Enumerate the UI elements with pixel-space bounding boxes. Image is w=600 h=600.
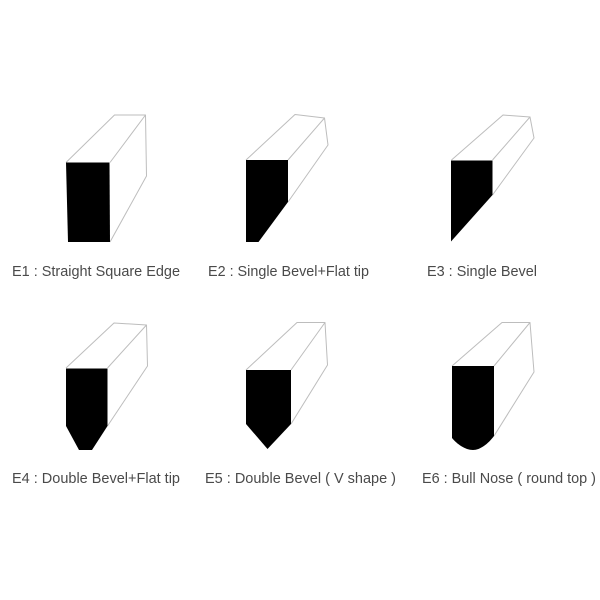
icon: E4 profile bbox=[66, 323, 148, 450]
icon: E3 profile bbox=[451, 115, 534, 242]
icon: E1 profile bbox=[66, 115, 146, 242]
label: E1: E1 : Straight Square Edge bbox=[12, 263, 180, 280]
panel: E5 double bevel V shape bbox=[205, 322, 396, 487]
label: E4: E4 : Double Bevel+Flat tip bbox=[12, 470, 180, 487]
label: E2: E2 : Single Bevel+Flat tip bbox=[208, 263, 369, 280]
label: E3: E3 : Single Bevel bbox=[427, 263, 537, 280]
panel: E4 double bevel and flat tip bbox=[12, 323, 180, 487]
icon: E2 profile bbox=[246, 114, 328, 242]
label: E5: E5 : Double Bevel ( V shape ) bbox=[205, 470, 396, 487]
icon: E6 profile bbox=[452, 322, 534, 450]
panel: E2 single bevel and flat tip bbox=[208, 114, 369, 280]
panel: E6 bull nose round top bbox=[422, 322, 596, 487]
icon: E5 profile bbox=[246, 322, 328, 449]
panel: E3 single bevel bbox=[427, 115, 537, 280]
label: E6: E6 : Bull Nose ( round top ) bbox=[422, 470, 596, 487]
panel: E1 straight square edge bbox=[12, 115, 180, 280]
